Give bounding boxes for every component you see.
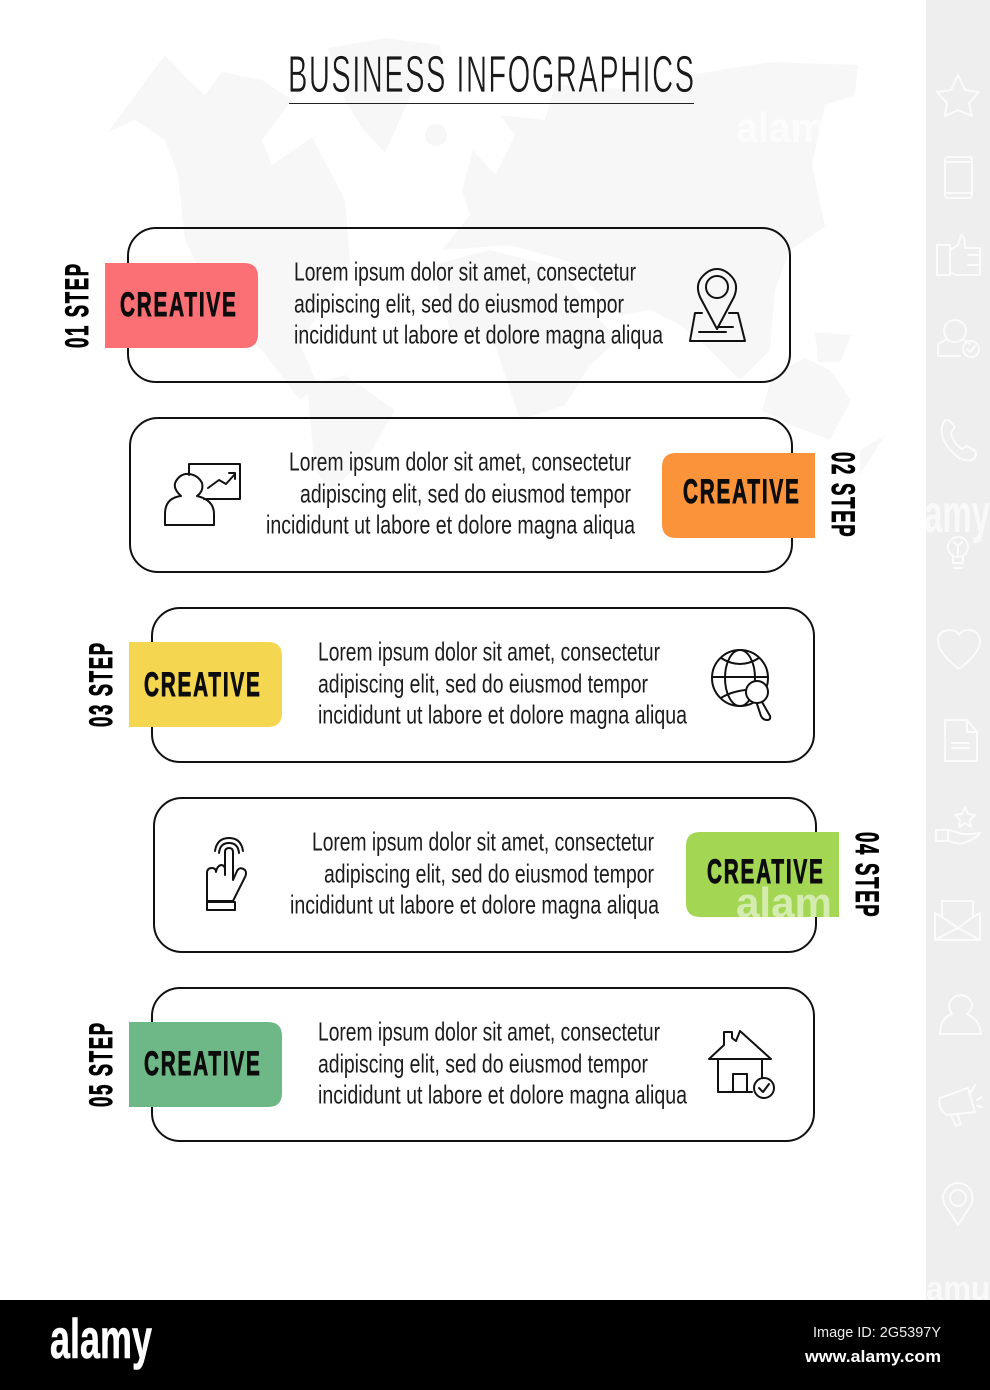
watermark on green label: alam bbox=[736, 879, 832, 926]
icon: light bulb bbox=[948, 537, 968, 568]
background world map bbox=[108, 38, 885, 490]
icon: heart bbox=[938, 630, 980, 669]
label: creative yellow bbox=[129, 642, 282, 727]
icon: megaphone bbox=[939, 1085, 982, 1126]
text block 2: incididunt ut labore et dolore magna aliqua bbox=[266, 510, 635, 540]
text block 3: incididunt ut labore et dolore magna aliqua bbox=[318, 700, 687, 730]
icon: hand with star bbox=[936, 807, 980, 844]
icon: envelope bbox=[935, 901, 980, 940]
panel: step 5 bbox=[83, 988, 814, 1141]
text block 4: Lorem ipsum dolor sit amet, consectetur bbox=[312, 826, 654, 856]
text block 1 bbox=[294, 256, 663, 350]
icon: phone handset bbox=[942, 420, 976, 460]
icon: house with check bbox=[709, 1031, 774, 1098]
text block 2 bbox=[266, 446, 635, 540]
icon: location pin on map bbox=[690, 269, 745, 341]
text block 1: adipiscing elit, sed do eiusmod tempor bbox=[294, 288, 624, 318]
text block 4: incididunt ut labore et dolore magna aliqua bbox=[290, 890, 659, 920]
step number 01: 01 STEP bbox=[59, 264, 95, 348]
title: BUSINESS INFOGRAPHICS bbox=[288, 45, 694, 103]
icon: pointing hand bbox=[207, 838, 246, 910]
website: www.alamy.com bbox=[804, 1347, 941, 1366]
panel: step 2 bbox=[130, 418, 861, 572]
text block 3: adipiscing elit, sed do eiusmod tempor bbox=[318, 668, 648, 698]
text block 4: adipiscing elit, sed do eiusmod tempor bbox=[324, 858, 654, 888]
text block 5: Lorem ipsum dolor sit amet, consectetur bbox=[318, 1016, 660, 1046]
text block 3: Lorem ipsum dolor sit amet, consectetur bbox=[318, 636, 660, 666]
text block 5: incididunt ut labore et dolore magna aliqua bbox=[318, 1080, 687, 1110]
label: creative orange: CREATIVE bbox=[683, 473, 799, 510]
icon: thumbs up bbox=[937, 235, 980, 275]
text block 2: Lorem ipsum dolor sit amet, consectetur bbox=[289, 446, 631, 476]
text block 1: Lorem ipsum dolor sit amet, consectetur bbox=[294, 256, 636, 286]
watermark on map: alam bbox=[736, 104, 826, 151]
icon: presenter with chart bbox=[165, 464, 240, 525]
label: creative yellow: CREATIVE bbox=[144, 666, 260, 703]
label: creative teal green: CREATIVE bbox=[144, 1045, 260, 1082]
icon: document bbox=[945, 720, 977, 761]
side panel bbox=[926, 0, 990, 1300]
panel: step 4 bbox=[154, 798, 885, 952]
label: creative red: CREATIVE bbox=[120, 286, 236, 323]
step number 02: 02 STEP bbox=[825, 452, 861, 537]
watermarks bbox=[736, 104, 990, 1308]
alamy logo: alamy bbox=[50, 1307, 152, 1370]
panel: step 3 bbox=[83, 608, 814, 762]
label: creative green bbox=[686, 832, 839, 926]
step number 04: 04 STEP bbox=[849, 832, 885, 917]
text block 1: incididunt ut labore et dolore magna aliqua bbox=[294, 320, 663, 350]
icon: tablet bbox=[945, 157, 972, 198]
label: creative orange bbox=[662, 453, 815, 538]
text block 5 bbox=[318, 1016, 687, 1110]
label: creative red bbox=[105, 263, 258, 348]
icon: user check bbox=[938, 320, 979, 357]
step number 03: 03 STEP bbox=[83, 643, 119, 727]
panel: step 1 bbox=[59, 228, 790, 382]
icon: user bbox=[940, 995, 981, 1034]
text block 3 bbox=[318, 636, 687, 730]
icon: star bbox=[937, 75, 979, 116]
image id: Image ID: 2G5397Y bbox=[813, 1324, 941, 1341]
footer bar bbox=[0, 1300, 990, 1390]
icon: globe with magnifier bbox=[712, 650, 770, 720]
text block 4 bbox=[290, 826, 659, 920]
label: creative green: CREATIVE bbox=[707, 853, 823, 890]
label: creative teal green bbox=[129, 1022, 282, 1107]
text block 2: adipiscing elit, sed do eiusmod tempor bbox=[300, 478, 631, 508]
icon: map pin bbox=[943, 1183, 972, 1225]
step number 05: 05 STEP bbox=[83, 1023, 119, 1107]
text block 5: adipiscing elit, sed do eiusmod tempor bbox=[318, 1048, 648, 1078]
